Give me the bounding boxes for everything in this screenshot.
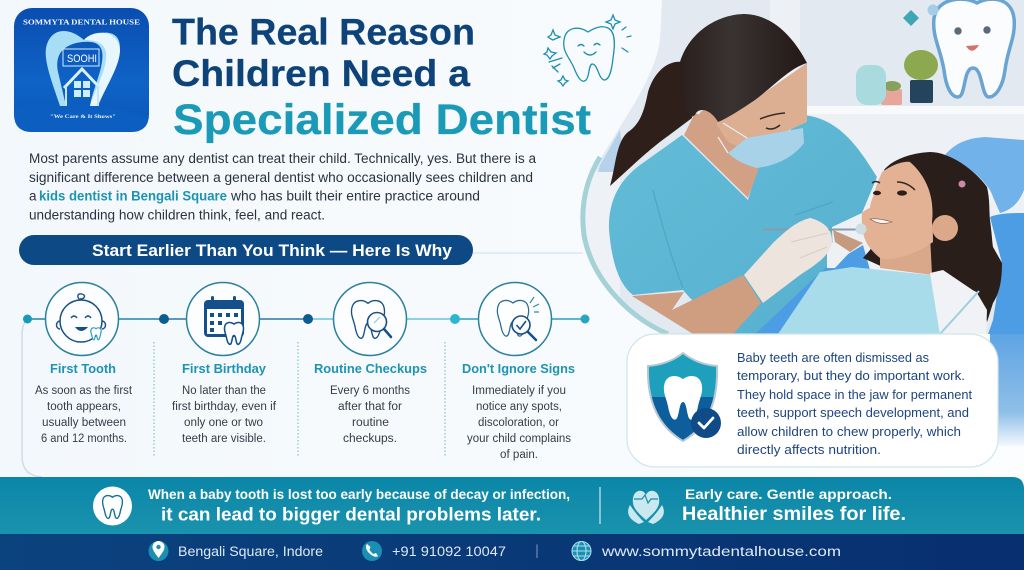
step: don't ignore signs: Immediately if you [472,385,566,397]
step: first birthday: first birthday, even if [172,401,277,413]
callout: why baby teeth matter: teeth, support speech development, and [737,405,969,420]
step: don't ignore signs [462,282,575,461]
icon: tooth in white circle [93,486,132,526]
logo badge [14,8,149,132]
step: don't ignore signs: Don't Ignore Signs [462,362,575,376]
glove [744,218,832,303]
title: Specialized Dentist [173,96,591,144]
icon: heart in caring hands [628,491,664,524]
step: first birthday: teeth are visible. [182,433,266,445]
footer contact bar: +91 91092 10047 [392,544,506,559]
step: don't ignore signs: your child complains [467,433,571,445]
step: routine checkups: Every 6 months [330,385,410,397]
icon: tooth with check magnifier [478,282,552,356]
hair clip [958,180,966,188]
icon: smiling tooth mascot [544,15,631,86]
icon: calendar with tooth [186,282,260,356]
callout: why baby teeth matter: temporary, but they do important work. [737,368,965,383]
photo frame curve [583,157,668,334]
step: first birthday [172,282,277,445]
step: first tooth: First Tooth [50,362,116,376]
step: routine checkups [314,282,427,445]
step: routine checkups: Routine Checkups [314,362,427,376]
nurse hair [680,14,807,122]
child hair [863,152,1002,322]
step: first birthday: No later than the [182,385,266,397]
intro paragraph: a [29,188,37,204]
callout: why baby teeth matter: directly affects nutrition. [737,442,881,457]
intro paragraph [29,151,536,222]
icon: tooth with magnifier [334,282,406,356]
bib [778,267,977,334]
dental mirror [763,228,860,230]
intro paragraph: significant difference between a general dentist who occasionally sees children and [29,170,533,185]
step: routine checkups: after that for [338,401,402,413]
callout: why baby teeth matter: Baby teeth are often dismissed as [737,350,929,365]
scrubs [609,115,877,334]
teal message banner: Healthier smiles for life. [682,504,906,525]
step: first tooth: 6 and 12 months. [41,433,127,445]
step: first tooth: As soon as the first [35,385,133,397]
logo badge: "We Care & It Shows" [50,114,116,120]
callout: why baby teeth matter [627,334,998,467]
child sleeve [930,270,987,337]
intro paragraph: who has built their entire practice around [230,188,480,204]
face [715,63,807,150]
chair headrest [945,137,1024,213]
ear [699,110,717,124]
intro paragraph: kids dentist in Bengali Square [39,188,227,204]
step: first tooth: tooth appears, [47,401,121,413]
surgical mask [728,128,804,168]
child face [862,162,933,259]
teal message banner: When a baby tooth is lost too early because of decay or infection, [148,487,570,502]
title [172,12,591,144]
step: first birthday: only one or two [184,417,263,429]
chair seat [755,245,870,334]
icon: globe [572,542,591,560]
teal message banner [0,477,1024,535]
icon: shield with tooth and check [648,353,721,441]
intro paragraph: understanding how children think, feel, and react. [29,208,325,222]
timeline connector [22,314,590,477]
footer contact bar [0,534,1024,570]
title: The Real Reason [172,12,475,52]
wall mascot [934,0,1014,97]
icon: baby with tooth [46,282,118,356]
step: first tooth [35,282,133,445]
callout: why baby teeth matter: allow children to chew properly, which [737,424,961,439]
icon: map pin [148,541,168,561]
child neck [880,244,932,275]
teal message banner: Early care. Gentle approach. [685,486,892,502]
step: routine checkups: checkups. [343,433,397,445]
forearm [632,275,761,334]
child ear [932,215,958,241]
callout: why baby teeth matter: They hold space in the jaw for permanent [737,387,972,402]
eye [760,113,785,129]
step: don't ignore signs: notice any spots, [476,401,562,413]
step: routine checkups: routine [352,417,389,429]
plant and pots [910,80,933,103]
footer contact bar: www.sommytadentalhouse.com [601,544,841,559]
footer contact bar: Bengali Square, Indore [178,544,323,559]
step: don't ignore signs: discoloration, or [478,417,559,429]
logo badge: SOOHI [67,53,97,65]
section heading pill [19,235,473,265]
child features [872,182,915,190]
photo: dentist treating a smiling child [575,0,1024,340]
teal message banner: it can lead to bigger dental problems later. [161,504,541,524]
icon: phone [362,541,382,561]
logo badge: SOMMYTA DENTAL HOUSE [23,18,140,26]
title: Children Need a [172,53,470,94]
chair back [986,213,1024,340]
ponytail [610,62,692,186]
section heading pill: Start Earlier Than You Think — Here Is Why [92,242,453,260]
step: don't ignore signs: of pain. [500,449,538,461]
neck [684,113,760,198]
chair lower edge behind callout [990,334,1024,446]
shelf [806,106,1024,114]
step: first birthday: First Birthday [182,362,266,376]
intro paragraph: Most parents assume any dentist can treat their child. Technically, yes. But there is a [29,151,536,166]
step: first tooth: usually between [42,417,126,429]
